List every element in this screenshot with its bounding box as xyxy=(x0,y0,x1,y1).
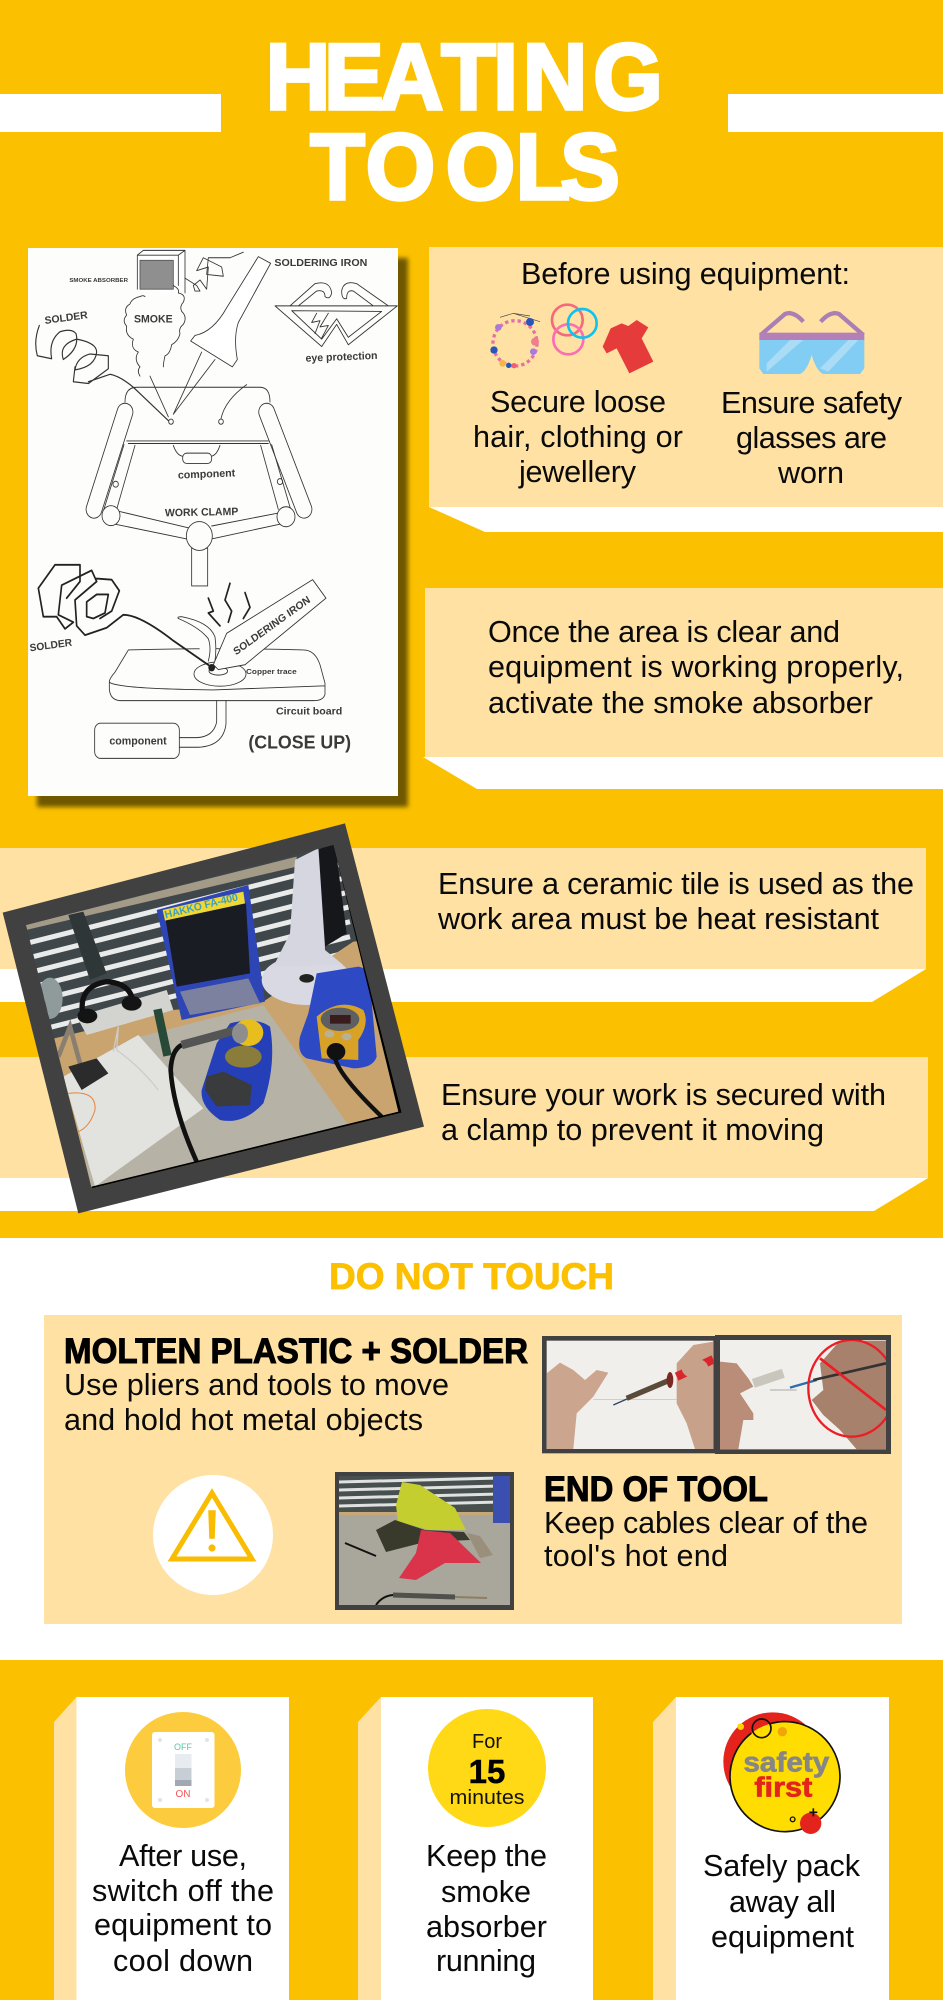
diagram labels: Circuit board xyxy=(276,706,342,718)
photo: heat gun, glue gun and iron xyxy=(335,1472,514,1610)
text: end of tool: Keep cables clear of the xyxy=(544,1506,868,1540)
text: keep absorber running: running xyxy=(436,1944,536,1978)
panel: ceramic tile xyxy=(0,848,926,1002)
panel: soldering diagram xyxy=(28,248,408,807)
icon: 15 minutes badge: 15 xyxy=(469,1753,505,1790)
text: ensure safety glasses xyxy=(721,386,903,490)
icon: circuit board close up xyxy=(95,580,326,758)
icon: eye protection xyxy=(275,283,397,347)
icon: heat lines xyxy=(208,583,250,626)
diagram labels: SOLDER xyxy=(44,310,88,327)
text: molten plastic and solder: Use pliers and tools to move xyxy=(64,1368,449,1402)
text: molten plastic and solder: MOLTEN PLASTIC + SOLDER xyxy=(64,1331,528,1371)
text: activate smoke absorber xyxy=(488,615,904,720)
diagram labels: WORK CLAMP xyxy=(165,507,239,520)
lamp and monitor xyxy=(262,843,352,1005)
text: keep absorber running: absorber xyxy=(426,1910,547,1944)
diagram labels: SMOKE xyxy=(134,314,173,326)
icon: safety first badge xyxy=(715,1706,855,1847)
diagram labels: SOLDER xyxy=(29,637,73,655)
icons: jewellery, hair ties and shirt xyxy=(490,305,653,373)
diagram labels: SOLDERING IRON xyxy=(232,594,312,658)
text: secure loose items: jewellery xyxy=(518,455,637,489)
text: switch off: cool down xyxy=(113,1944,253,1978)
diagram labels: (CLOSE UP) xyxy=(248,732,351,753)
text: keep absorber running: smoke xyxy=(441,1875,531,1909)
photo: correct and incorrect iron grip xyxy=(542,1335,895,1454)
text: switch off: equipment to xyxy=(94,1908,272,1942)
diagram labels: SMOKE ABSORBER xyxy=(69,278,128,284)
text: end of tool: tool's hot end xyxy=(544,1539,728,1573)
card: keep absorber running xyxy=(358,1697,593,2000)
text: ensure safety glasses: Ensure safety xyxy=(721,386,903,420)
text: molten plastic and solder: and hold hot metal objects xyxy=(64,1403,423,1437)
heading: before using equipment: Before using equipment: xyxy=(521,257,850,291)
icon: close up solder xyxy=(38,565,213,668)
title xyxy=(0,25,943,220)
icon: 15 minutes badge: minutes xyxy=(450,1787,524,1809)
icon: 15 minutes badge: For xyxy=(472,1731,502,1753)
text: secure with clamp: Ensure your work is secured with xyxy=(441,1078,886,1112)
text: keep absorber running: Keep the xyxy=(426,1839,547,1873)
diagram labels: component xyxy=(109,736,167,747)
icon: safety glasses xyxy=(759,313,864,374)
text: activate smoke absorber: equipment is working properly, xyxy=(488,650,904,684)
text: switch off: switch off the xyxy=(92,1874,274,1908)
icon: switch: ON xyxy=(176,1789,190,1800)
text: ceramic tile xyxy=(437,867,914,936)
text: pack away: away all xyxy=(729,1885,836,1919)
heading: do not touch: DO NOT TOUCH xyxy=(329,1256,614,1297)
text: secure with clamp xyxy=(441,1078,886,1147)
text: secure loose items: Secure loose xyxy=(490,385,666,419)
text: molten plastic and solder xyxy=(64,1331,528,1437)
text: switch off: After use, xyxy=(119,1839,247,1873)
icon: 15 minutes badge xyxy=(428,1709,546,1827)
text: ceramic tile: Ensure a ceramic tile is used as the xyxy=(438,867,914,901)
text: secure loose items xyxy=(473,385,683,489)
iron stand xyxy=(171,1019,272,1162)
diagram labels: component xyxy=(178,468,236,482)
icon: switch: OFF xyxy=(174,1742,192,1752)
title: HEATING xyxy=(266,25,663,130)
smoke absorber unit xyxy=(157,885,265,1020)
diagram labels: SOLDERING IRON xyxy=(274,258,367,269)
card: switch off xyxy=(54,1697,289,2000)
text: ensure safety glasses: glasses are xyxy=(736,421,887,455)
text: secure loose items: hair, clothing or xyxy=(473,420,683,454)
text: switch off xyxy=(92,1839,274,1978)
icon: smoke cloud xyxy=(124,286,185,376)
card: pack away xyxy=(653,1697,889,2000)
icon: safety first badge: first xyxy=(754,1772,812,1803)
panel: activate smoke absorber xyxy=(423,588,943,789)
text: pack away: equipment xyxy=(711,1920,854,1954)
icon: warning triangle in circle xyxy=(153,1475,273,1595)
title: TOOLS xyxy=(310,115,620,220)
smoke absorber unit: HAKKO FA-400 xyxy=(163,891,239,921)
panel: warnings xyxy=(44,1315,902,1624)
text: end of tool xyxy=(544,1469,868,1573)
panel: before using equipment xyxy=(429,247,943,532)
text: ensure safety glasses: worn xyxy=(777,456,844,490)
icon: solder coil xyxy=(36,325,168,421)
section: do not touch xyxy=(0,1238,943,1660)
text: secure with clamp: a clamp to prevent it moving xyxy=(441,1113,824,1147)
icon: smoke absorber xyxy=(137,250,243,293)
text: keep absorber running xyxy=(426,1839,547,1978)
icon: safety first badge: safety xyxy=(743,1747,830,1778)
diagram labels xyxy=(29,258,378,753)
icon: switch xyxy=(125,1712,241,1828)
photo: soldering workstation xyxy=(0,823,424,1213)
icon: work clamp xyxy=(94,385,304,586)
panel: secure with clamp xyxy=(0,1057,928,1211)
text: pack away xyxy=(703,1849,861,1954)
text: end of tool: END OF TOOL xyxy=(544,1469,768,1509)
text: ceramic tile: work area must be heat resistant xyxy=(437,902,880,936)
diagram labels: eye protection xyxy=(305,351,378,365)
diagram labels: Copper trace xyxy=(246,669,297,676)
text: pack away: Safely pack xyxy=(703,1849,861,1883)
soldering station xyxy=(299,967,382,1117)
icon: soldering iron xyxy=(150,257,271,417)
text: activate smoke absorber: activate the smoke absorber xyxy=(488,686,873,720)
text: activate smoke absorber: Once the area is clear and xyxy=(488,615,840,649)
